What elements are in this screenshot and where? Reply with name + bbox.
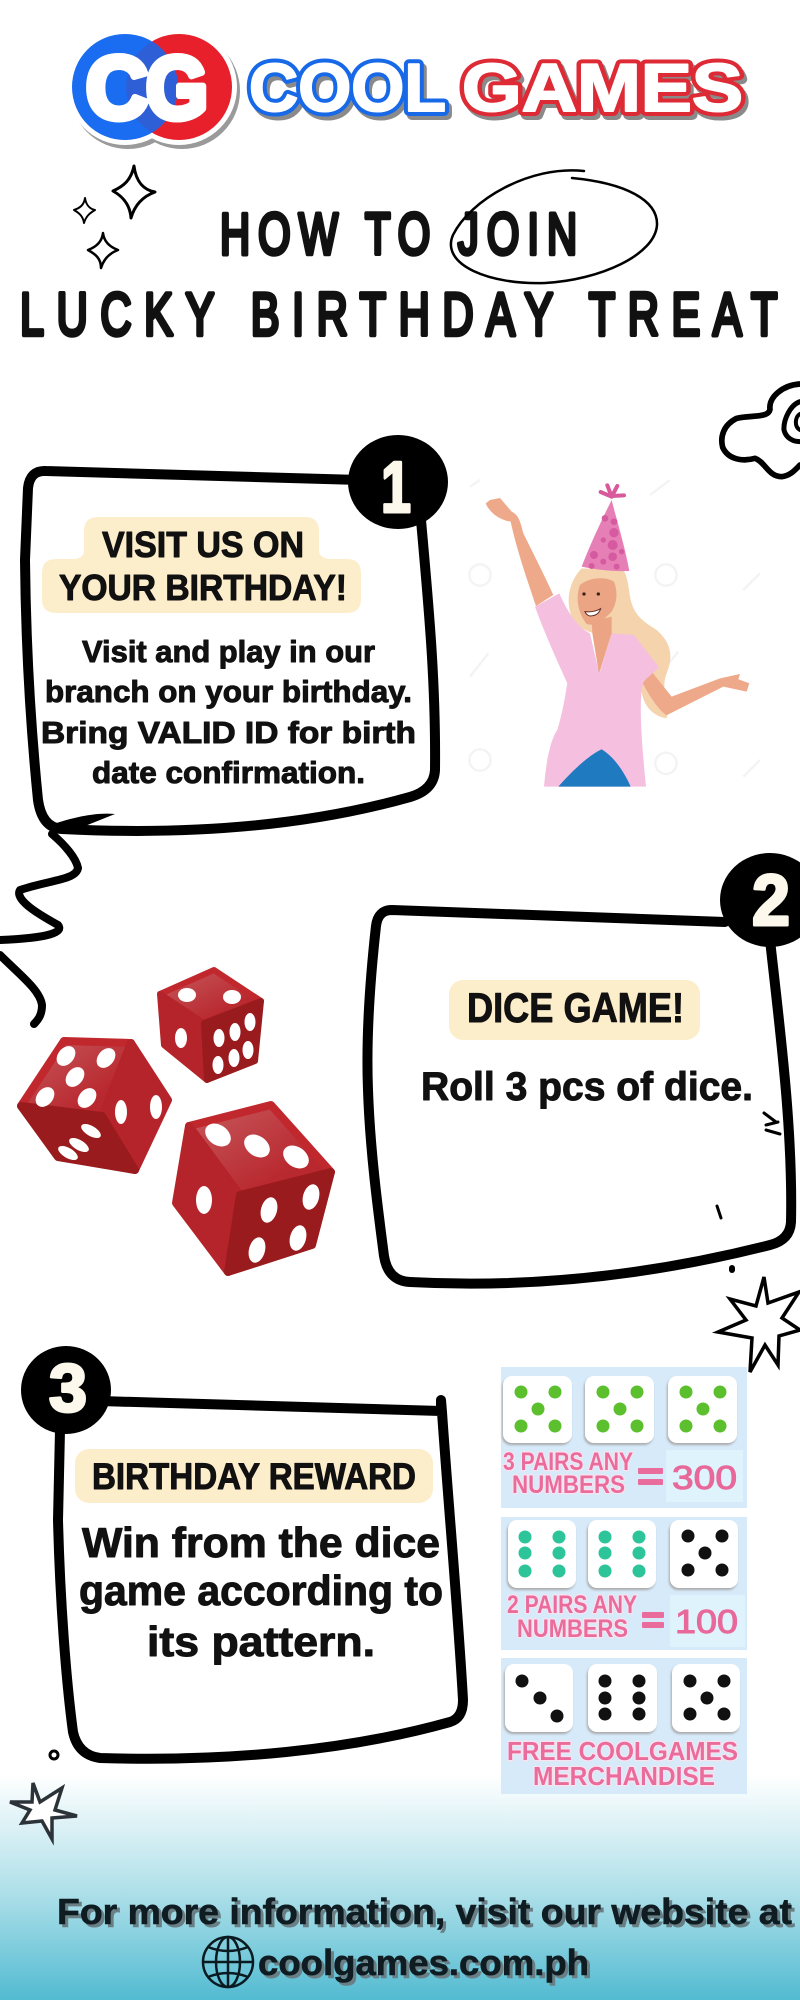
faint watermarks (469, 480, 760, 777)
body text (41, 634, 416, 790)
prize row: 3 pairs = 300 (501, 1367, 747, 1508)
step number badge 3 (21, 1346, 111, 1434)
body text: branch on your birthday. (45, 674, 412, 709)
heading: YOUR BIRTHDAY! (59, 567, 347, 608)
decoration: squiggle line (0, 834, 78, 1024)
panel frame (25, 471, 435, 831)
heading: VISIT US ON (102, 524, 304, 565)
rule label: 2 PAIRS ANY (507, 1591, 637, 1619)
heading: DICE GAME! (467, 984, 684, 1031)
prize row: 2 pairs = 100 (501, 1517, 747, 1650)
die: medium (21, 1041, 168, 1170)
body text: game according to (79, 1567, 443, 1614)
panel frame (58, 1400, 463, 1759)
dice row (505, 1664, 740, 1732)
heading highlight (75, 1449, 433, 1503)
merchandise label: FREE COOLGAMES (507, 1736, 738, 1766)
footer line 1: For more information, visit our website at (57, 1891, 792, 1932)
body text: Bring VALID ID for birth (41, 715, 416, 750)
value box (666, 1450, 743, 1502)
merchandise label: MERCHANDISE (533, 1761, 715, 1791)
value box (670, 1595, 745, 1647)
step number badge 3: 3 (49, 1350, 87, 1426)
panel: step 3 (21, 1346, 463, 1759)
dress (535, 593, 659, 787)
footer line 2: coolgames.com.ph (261, 1945, 592, 1986)
icon: globe (203, 1937, 253, 1987)
dice row (503, 1376, 737, 1443)
equals sign (638, 1468, 663, 1485)
illustration: woman with party hat (469, 480, 760, 787)
eyes (582, 592, 600, 596)
step number badge 1: 1 (381, 448, 411, 528)
body text: Win from the dice (82, 1519, 440, 1566)
illustration: three red dice (21, 970, 331, 1272)
neckline (592, 617, 612, 674)
frame spike (48, 814, 115, 832)
logo badge: CG circles: C (86, 38, 148, 137)
heading (59, 524, 347, 608)
prize row: free merchandise (501, 1658, 747, 1794)
footer line 1: For more information, visit our website at (60, 1894, 795, 1935)
footer line 2: coolgames.com.ph (258, 1942, 589, 1983)
merchandise label (507, 1736, 738, 1791)
body text (79, 1519, 443, 1665)
decoration: star scribble top (718, 1277, 800, 1372)
skirt (558, 749, 631, 787)
rule label: NUMBERS (517, 1615, 628, 1643)
body text: its pattern. (147, 1618, 375, 1665)
panel: step 1 (25, 435, 448, 832)
footer: website call to action (57, 1891, 795, 1987)
step number badge 2: 2 (752, 861, 790, 941)
rule label: 3 PAIRS ANY (503, 1448, 633, 1476)
left arm (486, 498, 553, 606)
panel: step 2 (367, 853, 800, 1284)
scribble marks (717, 1113, 780, 1270)
right arm (643, 672, 749, 715)
logo: CoolGames (67, 29, 743, 145)
title line: HOW TO JOIN: HOW TO JOIN (220, 201, 577, 267)
dice row (508, 1520, 738, 1588)
icon: sparkles (74, 166, 155, 268)
die: small (160, 970, 261, 1080)
equals sign (642, 1612, 664, 1628)
logo badge: CG circles (67, 29, 237, 145)
title highlight: hand-drawn ellipse around JOIN (451, 170, 657, 283)
small circle mark (50, 1751, 58, 1759)
rule label: NUMBERS (512, 1471, 625, 1499)
logo wordmark: COOL: COOL (249, 50, 446, 126)
footer gradient background (0, 1775, 800, 2000)
heading highlight (42, 517, 361, 613)
die: large (176, 1105, 331, 1272)
smile (585, 609, 601, 616)
prize table (501, 1367, 747, 1794)
party hat (582, 485, 629, 571)
logo wordmark: COOL: COOL (249, 50, 446, 126)
logo badge: CG circles: G (146, 38, 208, 137)
logo wordmark: GAMES: GAMES (462, 50, 743, 126)
face (578, 578, 616, 625)
body text: Visit and play in our (82, 634, 375, 669)
heading highlight (449, 980, 700, 1040)
value: 100 (675, 1603, 738, 1640)
rule label (507, 1591, 637, 1643)
value: 300 (672, 1459, 737, 1496)
decoration: star scribble bottom (10, 1783, 77, 1839)
title line: LUCKY BIRTHDAY TREAT: LUCKY BIRTHDAY TREAT (20, 282, 777, 349)
hair (569, 568, 670, 718)
body text: date confirmation. (92, 755, 365, 790)
step number badge 2 (720, 853, 800, 947)
step number badge 1 (348, 435, 448, 529)
panel frame (367, 910, 791, 1284)
rule label (503, 1448, 633, 1499)
decoration: cloud scribble (722, 384, 800, 477)
body text: Roll 3 pcs of dice. (421, 1065, 753, 1109)
logo wordmark: GAMES: GAMES (462, 50, 743, 126)
heading: BIRTHDAY REWARD (92, 1456, 416, 1497)
